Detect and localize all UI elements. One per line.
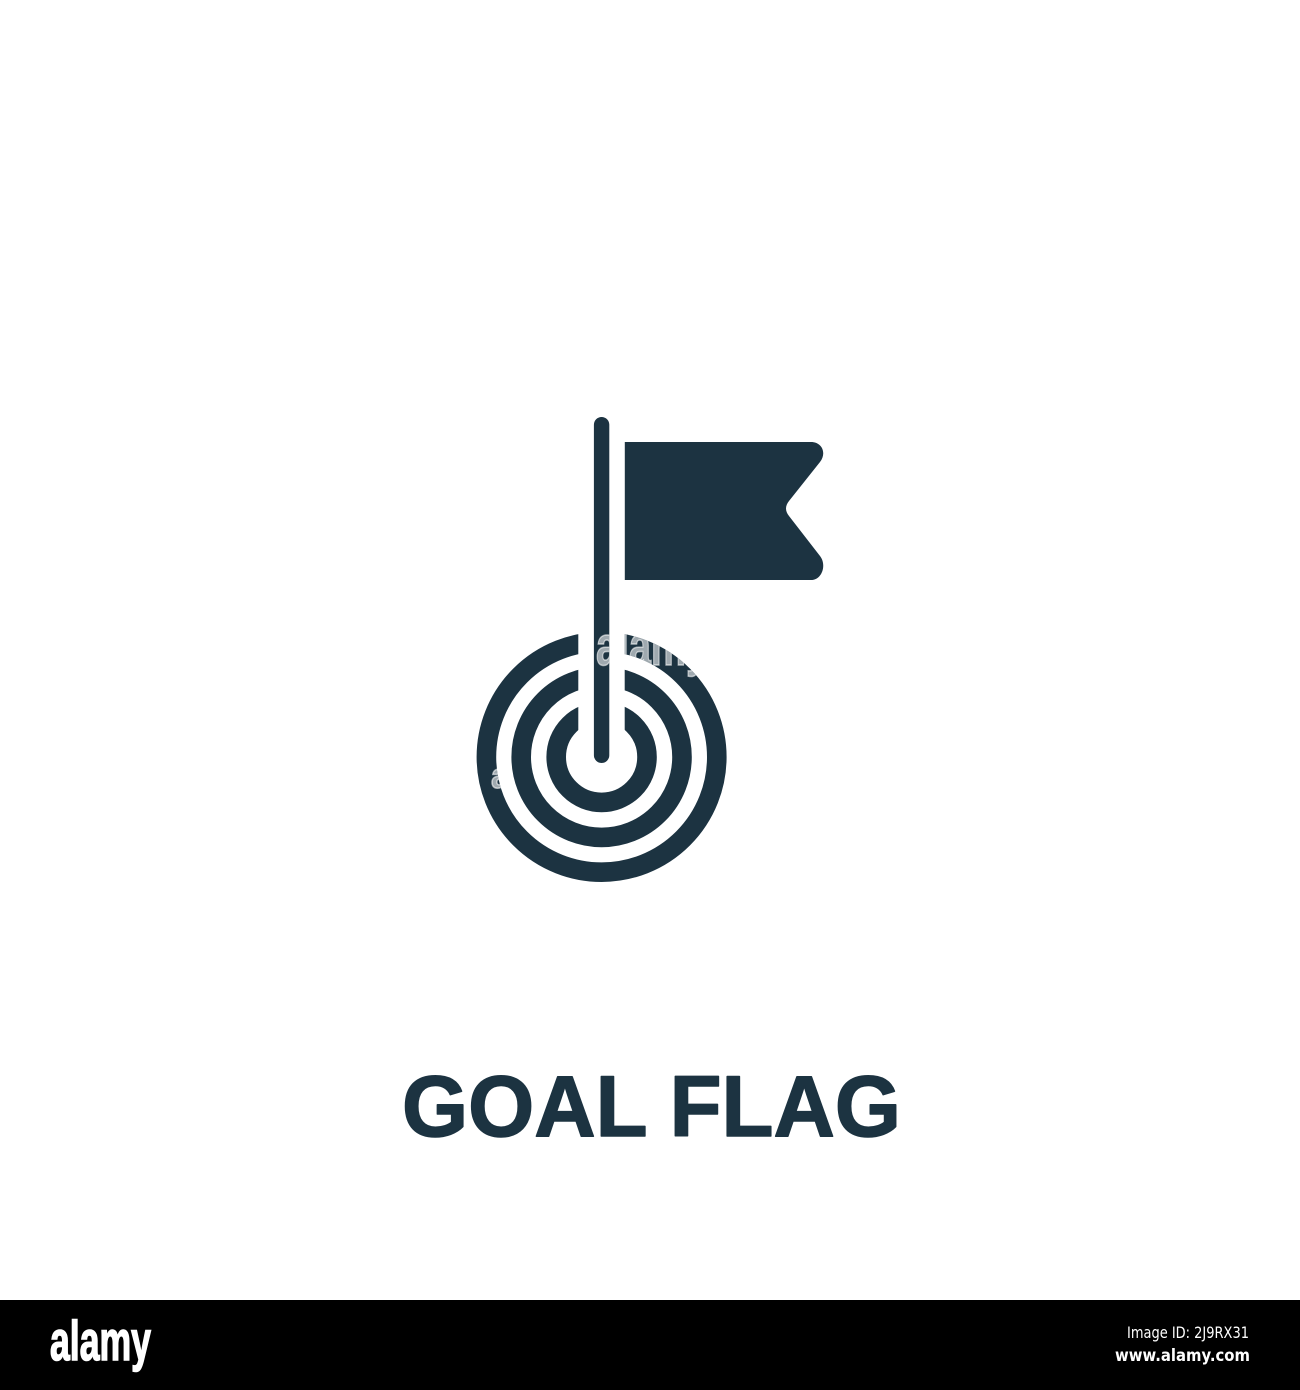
title: GOAL FLAG: [402, 1059, 901, 1155]
icon: target rings: [486, 620, 717, 872]
watermark fragments on icon: [491, 634, 696, 789]
icon: flag pole: [594, 417, 609, 763]
footer logo: alamy: [50, 1309, 151, 1372]
footer url: www.alamy.com: [1115, 1346, 1250, 1366]
footer image id: Image ID: 2J9RX31: [1127, 1323, 1249, 1342]
watermark fragments on icon: a: [491, 755, 511, 796]
infographic canvas: [0, 417, 1300, 1390]
footer bar: [0, 1300, 1300, 1390]
watermark fragments on icon: alamy: [596, 614, 708, 677]
icon: goal flag on target: [486, 417, 823, 872]
icon: flag banner: [625, 442, 823, 580]
